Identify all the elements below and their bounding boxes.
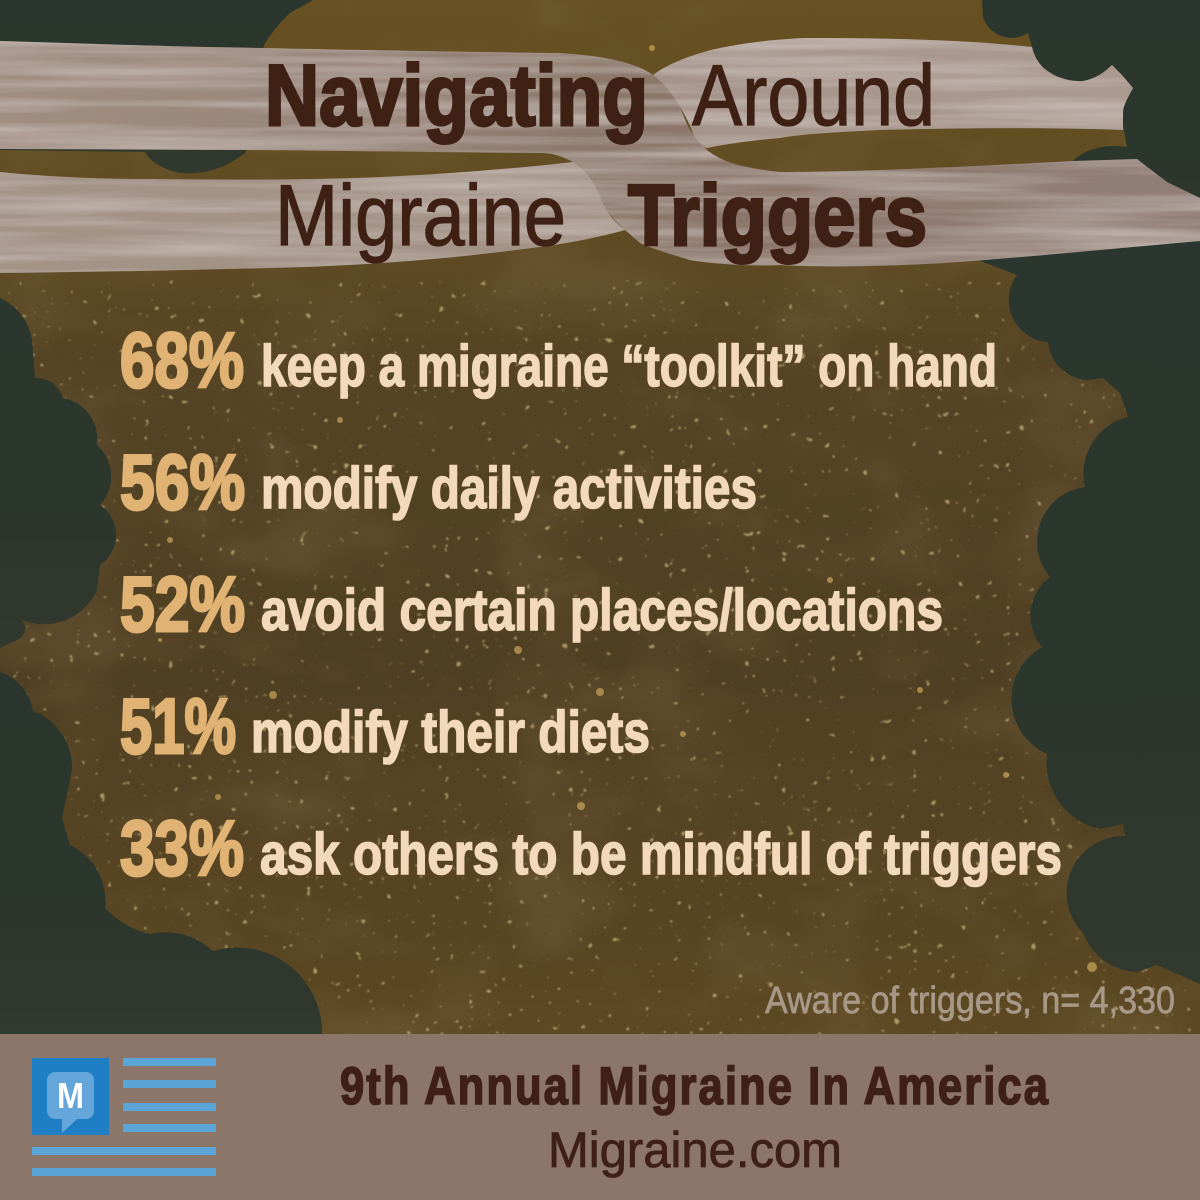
- footer panel: [0, 1034, 1200, 1200]
- stat: 68% keep a migraine toolkit on hand: [120, 316, 997, 404]
- title word: Triggers: Triggers: [628, 168, 927, 264]
- stat: 68% keep a migraine toolkit on hand: 68%: [120, 316, 244, 404]
- stat: 68% keep a migraine toolkit on hand: keep a migraine “toolkit” on hand: [261, 334, 997, 399]
- ribbons: winding wooden path behind the title: [0, 38, 1200, 273]
- stat: 56% modify daily activities: [120, 438, 757, 526]
- stat: 51% modify their diets: modify their diets: [251, 700, 650, 765]
- stat: 52% avoid certain places/locations: [120, 560, 943, 648]
- footer heading: 9th Annual Migraine In America: [340, 1057, 1050, 1116]
- title word: Around: Around: [692, 48, 935, 144]
- stat: 51% modify their diets: [120, 682, 650, 770]
- tree: top right: [982, 0, 1200, 260]
- ribbon: main band crossing from upper left to lower right: [0, 41, 1200, 266]
- stat: 33% ask others to be mindful of triggers: [120, 804, 1062, 892]
- stat: 56% modify daily activities: modify daily activities: [261, 456, 757, 521]
- stat: 52% avoid certain places/locations: avoid certain places/locations: [261, 578, 943, 643]
- stat: 56% modify daily activities: 56%: [120, 438, 245, 526]
- tree: left middle: [0, 298, 116, 648]
- tree: top left: [0, 0, 313, 173]
- stat: 51% modify their diets: 51%: [120, 682, 236, 770]
- icon: Migraine.com flag logo: M: [57, 1075, 84, 1116]
- tree: right side: [960, 240, 1200, 984]
- tree: left lower: [0, 672, 322, 1040]
- icon: Migraine.com flag logo: [32, 1058, 216, 1176]
- footer website: Migraine.com: [548, 1122, 842, 1178]
- stat: 52% avoid certain places/locations: 52%: [120, 560, 245, 648]
- stat: 33% ask others to be mindful of triggers: 33%: [120, 804, 244, 892]
- ribbon: lower left band: [0, 162, 625, 273]
- title: [265, 48, 935, 264]
- title word: Navigating: Navigating: [265, 48, 648, 144]
- title word: Migraine: Migraine: [275, 168, 566, 264]
- ribbon: upper right band: [653, 38, 1133, 148]
